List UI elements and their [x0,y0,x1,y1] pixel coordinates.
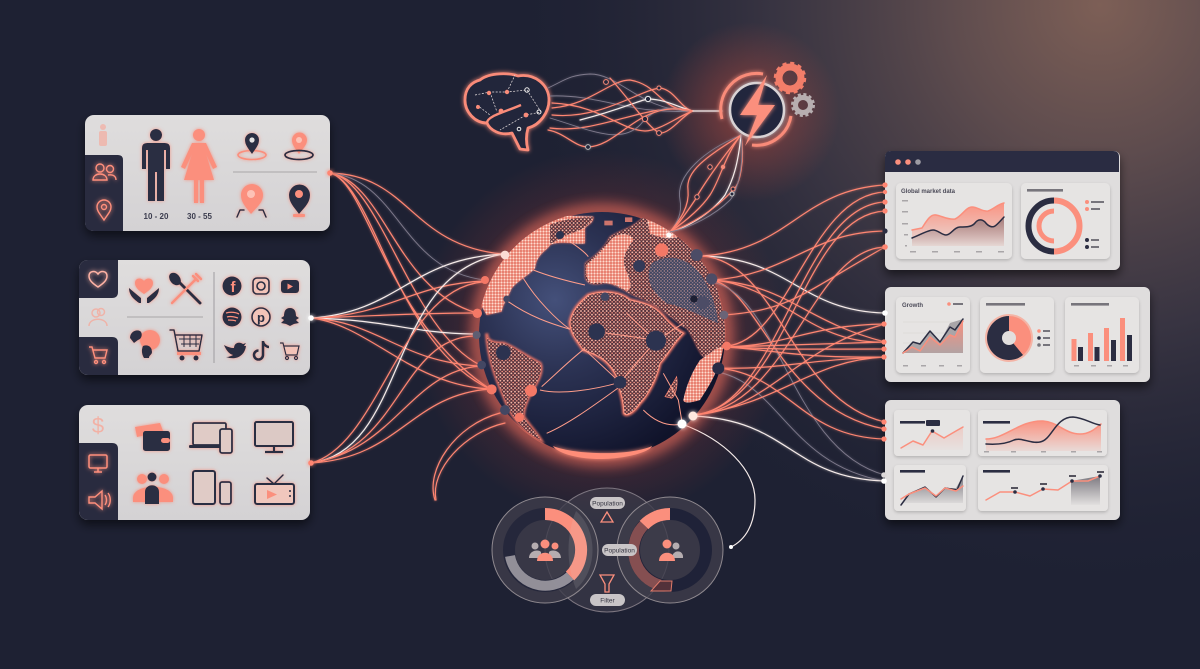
globe sphere [479,212,725,458]
sidebar tab bottom [79,337,118,375]
connection: coral lines to population rings [433,413,505,500]
donut legend [1085,200,1104,249]
wallet icon [135,423,170,451]
pill: population top: Population [592,500,623,508]
centre overlap lens [568,511,592,589]
faded dollar sign: $ [92,413,104,438]
milestones chart card [978,465,1108,511]
vertical divider [213,272,215,363]
male figure [142,129,170,201]
panel: trend dashboard [881,400,1120,520]
sidebar faded person [99,124,107,146]
axis ticks [902,200,1004,252]
globe halo [478,211,726,459]
pill: population centre: Population [604,548,635,554]
age label men: 10 - 20 [144,212,169,221]
spotify icon [222,308,242,326]
connections: demographics panel to globe [330,173,502,389]
connection: white line to population rings [682,424,755,549]
glowing white nodes [666,232,698,428]
sidebar monitor icon [89,455,107,472]
youtube icon [281,280,299,293]
people icon [659,540,683,561]
panel: spending and devices [79,405,314,520]
female figure [181,129,217,203]
sidebar speaker icon [89,491,110,509]
trend card with tooltip [894,410,970,456]
connector nodes [881,419,887,484]
pill: population top [590,497,625,509]
dual area chart card [978,410,1107,456]
pill: filter [590,594,625,606]
chart title: Growth [902,303,923,309]
globe nodes [473,231,731,422]
map pin coral with arrows [237,184,266,217]
age label women: 30 - 55 [187,212,213,221]
window header [885,151,1119,172]
sidebar cart icon [89,347,107,364]
brain icon [465,74,549,150]
head profiles icon [130,330,160,358]
tiktok icon [254,341,269,360]
population rings [492,488,723,612]
crescent reflection under globe [553,446,652,459]
pie chart card [980,297,1054,373]
connector nodes [881,310,888,360]
pill: population centre [602,544,637,556]
bolt to globe data streams [670,135,742,232]
sidebar tab [85,155,123,231]
lightning bolt [740,75,775,146]
grey gear [792,94,814,116]
faded users icon [89,308,107,326]
sidebar tab [79,443,118,520]
sidebar users icon [93,164,116,180]
instagram icon [253,278,269,294]
sidebar pin icon [97,200,111,220]
pill: filter: Filter [600,598,616,604]
panel: demographics [85,115,333,231]
growth chart card [896,297,970,373]
facebook icon: f [230,279,236,296]
audience group icon [133,472,173,504]
power ring [721,73,791,145]
continents [480,216,725,440]
people icon [529,540,561,561]
connector node [308,315,314,321]
mini cart icon [280,343,299,360]
panel: growth dashboard [881,287,1150,382]
connector node [327,170,333,176]
laptop and phone icon [189,423,232,453]
right donut [617,497,723,603]
divider [233,171,317,173]
divider [127,316,203,318]
bar chart card [1065,297,1139,373]
coral gear [776,64,804,92]
connector node [308,460,314,466]
connections: interests panel to globe [311,254,505,389]
panel: interests and social [79,260,314,375]
snapchat icon [281,308,299,326]
donut chart card [1021,183,1110,259]
twitter icon [224,343,246,358]
connections: globe to dashboards [693,185,885,481]
television icon [255,475,294,504]
left donut [492,497,598,603]
tablet and phone icon [193,471,231,504]
panel: global market dashboard [882,151,1120,270]
chart title: Global market data [901,189,956,195]
sidebar tab top [79,260,118,298]
map pin dark [289,184,310,217]
triangle icon [601,512,613,522]
fork and spoon icon [167,270,201,303]
bolt and gears icon [721,64,814,146]
pinterest icon: p [257,310,265,325]
map pin dark with ring [238,133,266,160]
map pin coral with ring [285,133,313,160]
connector nodes [882,182,888,250]
social icons grid [222,276,299,360]
globe [473,211,731,459]
care hands icon [129,279,159,303]
window dots [895,159,921,165]
monitor icon [255,422,293,452]
centre circle [545,488,669,612]
line chart card [896,183,1012,259]
small area chart card [894,465,966,511]
connections: spending panel to globe [311,254,505,463]
shopping cart icon [170,330,202,360]
pie legend [1037,329,1050,347]
heart icon [89,272,107,287]
funnel icon [600,575,614,592]
brain to bolt data streams [548,74,722,149]
